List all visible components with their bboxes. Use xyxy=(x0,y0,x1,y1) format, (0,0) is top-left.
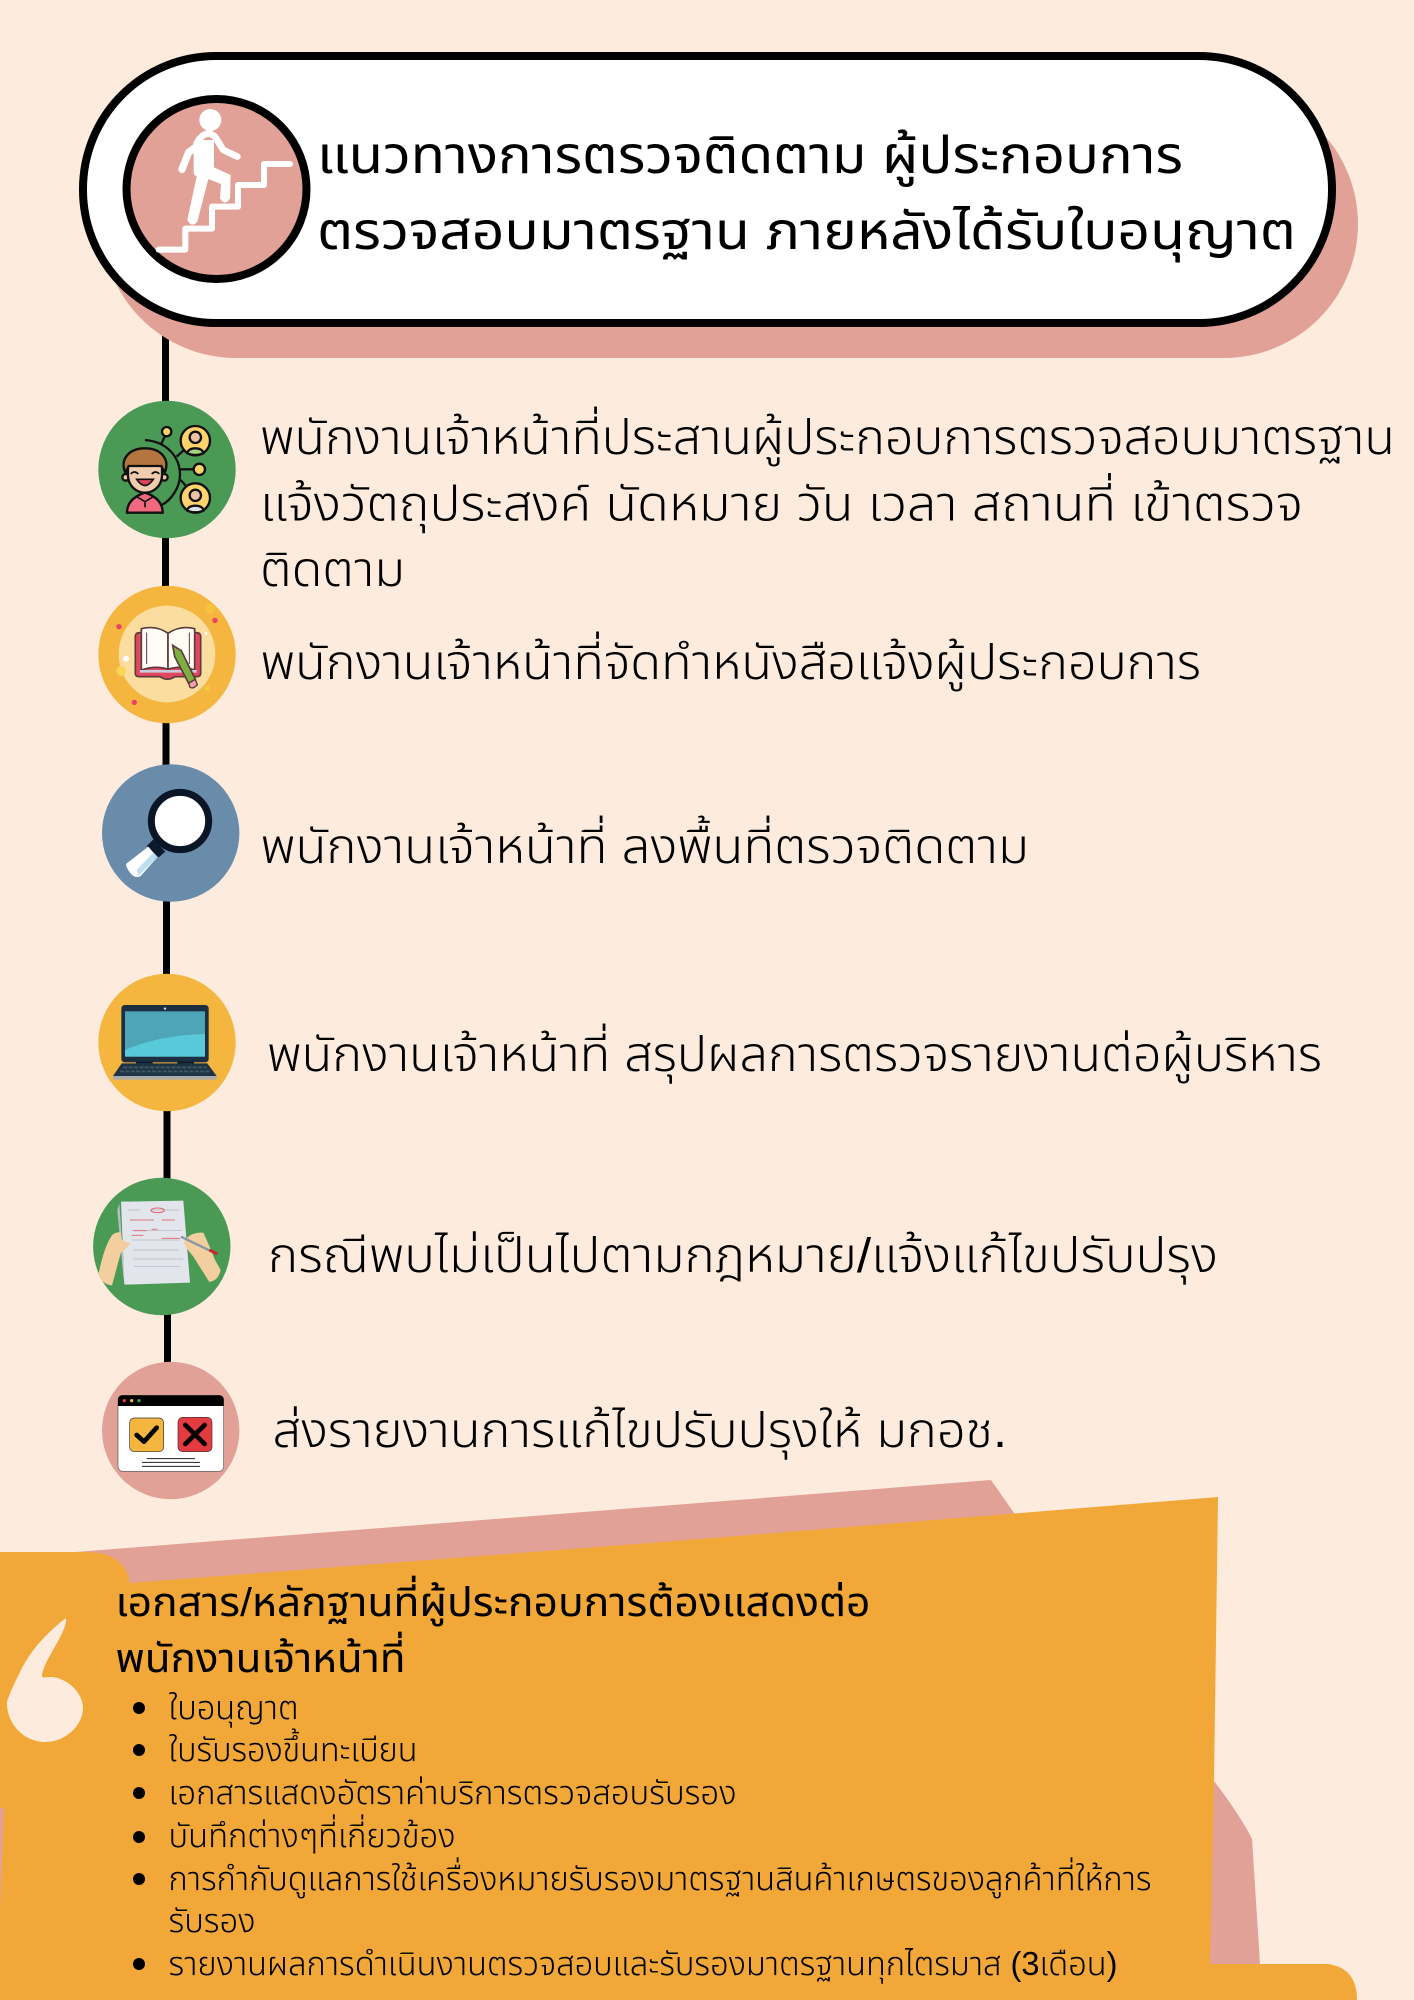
step 5 xyxy=(93,1178,1218,1315)
icon: magnifying glass xyxy=(102,764,239,902)
document list: รายงานผลการดำเนินงานตรวจสอบและรับรองมาตรฐานทุกไตรมาส (3เดือน) xyxy=(168,1945,1118,1984)
step 3 xyxy=(102,764,1029,902)
panel pink backing xyxy=(0,1480,1260,2000)
document list: ใบอนุญาต xyxy=(168,1689,298,1728)
step 4 xyxy=(98,974,1322,1111)
step 2 text: พนักงานเจ้าหน้าที่จัดทำหนังสือแจ้งผู้ประกอบการ xyxy=(260,631,1201,692)
panel heading xyxy=(116,1575,871,1681)
step 1 text: ติดตาม xyxy=(260,544,405,597)
step 1 xyxy=(98,401,1395,597)
step 6 xyxy=(102,1362,1007,1499)
panel heading: พนักงานเจ้าหน้าที่ xyxy=(116,1631,406,1681)
banner pill xyxy=(83,56,1332,323)
document list: รับรอง xyxy=(168,1902,256,1939)
step 1 text xyxy=(260,406,1395,597)
document list: การกำกับดูแลการใช้เครื่องหมายรับรองมาตรฐานสินค้าเกษตรของลูกค้าที่ให้การ xyxy=(168,1857,1152,1900)
document list xyxy=(133,1689,1152,1984)
step 2 xyxy=(98,586,1201,723)
icon: laptop xyxy=(98,974,236,1111)
step 3 text: พนักงานเจ้าหน้าที่ ลงพื้นที่ตรวจติดตาม xyxy=(260,815,1029,874)
document list: ใบรับรองขึ้นทะเบียน xyxy=(168,1728,418,1768)
banner shadow xyxy=(102,90,1358,358)
icon: quotation mark xyxy=(7,1618,83,1742)
step 1 text: พนักงานเจ้าหน้าที่ประสานผู้ประกอบการตรวจสอบมาตรฐาน xyxy=(260,406,1395,467)
step 5 text: กรณีพบไม่เป็นไปตามกฎหมาย/แจ้งแก้ไขปรับปรุง xyxy=(268,1230,1218,1285)
header banner xyxy=(83,56,1358,358)
document list: บันทึกต่างๆที่เกี่ยวข้อง xyxy=(168,1814,456,1854)
panel: required documents xyxy=(0,1480,1357,2000)
title: แนวทางการตรวจติดตาม ผู้ประกอบการ xyxy=(317,127,1183,187)
timeline connector line xyxy=(166,320,168,1365)
icon: hands marking a paper xyxy=(93,1178,230,1315)
step 4 text: พนักงานเจ้าหน้าที่ สรุปผลการตรวจรายงานต่อผู้บริหาร xyxy=(267,1023,1322,1084)
panel heading: เอกสาร/หลักฐานที่ผู้ประกอบการต้องแสดงต่อ xyxy=(116,1575,871,1626)
icon: open book with pencil xyxy=(98,586,236,723)
title xyxy=(317,127,1296,263)
step 6 text: ส่งรายงานการแก้ไขปรับปรุงให้ มกอช. xyxy=(272,1405,1007,1460)
panel orange shape xyxy=(0,1497,1357,2000)
icon: person climbing stairs xyxy=(126,99,306,279)
step 1 text: แจ้งวัตถุประสงค์ นัดหมาย วัน เวลา สถานที่ เข้าตรวจ xyxy=(260,472,1303,534)
title: ตรวจสอบมาตรฐาน ภายหลังได้รับใบอนุญาต xyxy=(317,203,1296,263)
document list: เอกสารแสดงอัตราค่าบริการตรวจสอบรับรอง xyxy=(168,1774,736,1811)
icon: check and cross window xyxy=(102,1362,239,1499)
icon: person with network xyxy=(98,401,236,538)
